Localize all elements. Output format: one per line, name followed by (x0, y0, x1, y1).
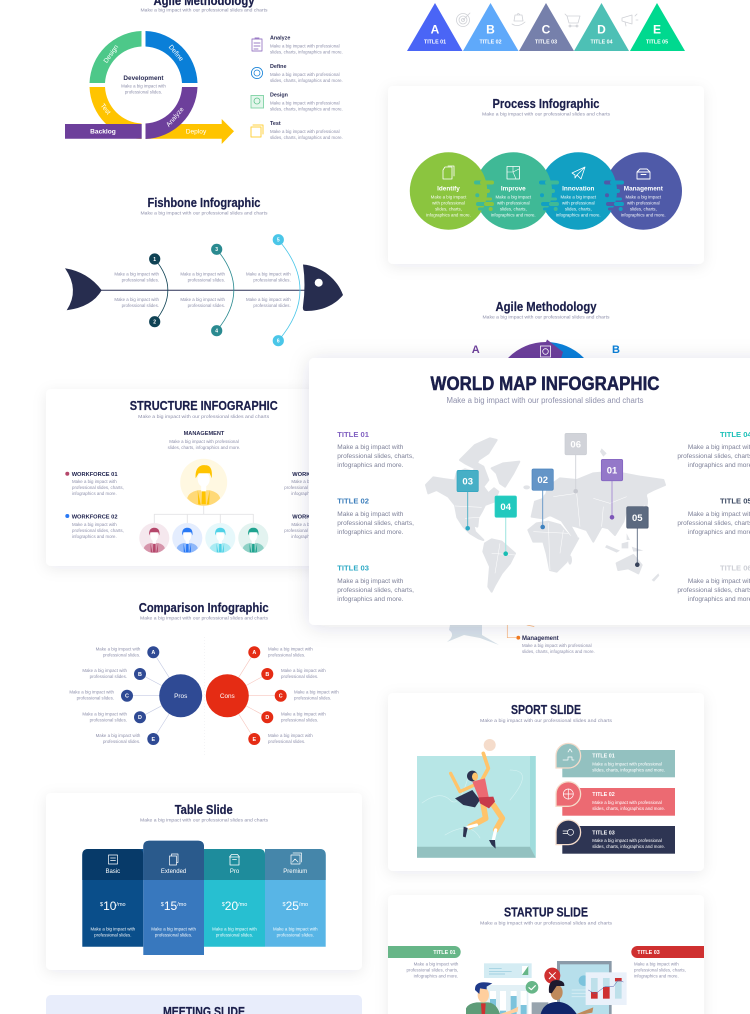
cycle top (493, 340, 599, 395)
step: innovation: Make a big impact (560, 195, 597, 200)
pros side: Make a big impact with (96, 733, 141, 738)
left titles: Make a big impact with (337, 511, 404, 518)
icon: hand bag (512, 14, 525, 26)
step: management: infographics and more. (621, 212, 666, 217)
heading: table: Table Slide (175, 803, 233, 817)
cycle diagram: Deploy (186, 128, 207, 135)
subtitle: Make a big impact with our professional slides and charts (480, 718, 613, 723)
panel: agile methodology lower (447, 299, 620, 654)
panel: fishbone infographic (65, 195, 343, 346)
tag: title 01: infographics and more. (414, 974, 458, 978)
icon: target (456, 13, 470, 26)
pros side: B (138, 672, 142, 678)
bone captions: professional slides. (188, 303, 225, 308)
subtitle: Make a big impact with our professional slides and charts (138, 414, 270, 419)
list: test: slides, charts, infographics and more. (270, 135, 343, 140)
pros side: C (125, 694, 129, 700)
cycle diagram: Define (167, 44, 185, 63)
icon: megaphone (622, 14, 638, 26)
panel: startup slide (388, 895, 704, 1014)
column: pro: Pro (230, 869, 240, 875)
org connectors (154, 505, 253, 523)
right titles (677, 430, 750, 603)
process circles (410, 152, 682, 230)
cons side: professional slides. (294, 696, 331, 701)
panel: meeting slide (46, 995, 362, 1014)
triangle E (630, 3, 685, 51)
bone captions (114, 272, 291, 308)
bone captions: Make a big impact with (246, 297, 291, 302)
step: improve: Improve (501, 186, 526, 192)
cycle diagram (65, 31, 234, 144)
cycle diagram: Test (99, 102, 112, 116)
step: identify: slides, charts, (435, 206, 462, 211)
list: define: Make a big impact with professional (270, 72, 340, 77)
column: extended: Make a big impact with (151, 927, 196, 932)
column: basic: /mo (116, 902, 126, 908)
tag: title 03: TITLE 03 (637, 950, 660, 956)
workforce 04: professional slides, charts, (284, 528, 336, 533)
panel: world map infographic (309, 358, 750, 625)
column: premium: Premium (283, 869, 307, 875)
step: identify: Make a big impact (431, 195, 467, 200)
cons side: professional slides. (281, 717, 318, 722)
column: premium: 25 (286, 899, 299, 913)
world map shape (426, 438, 665, 592)
panel: process infographic (388, 86, 704, 264)
list: test: Make a big impact with professional (270, 129, 340, 134)
triangle B (463, 3, 518, 51)
cons side: Make a big impact with (281, 711, 326, 716)
triangle C: C (542, 22, 551, 36)
cycle diagram: Development (123, 75, 164, 82)
step: improve: with professional (497, 200, 530, 206)
column: extended: 15 (164, 899, 178, 913)
step: improve: infographics and more. (491, 212, 536, 217)
workforce 01: Make a big impact with (72, 479, 117, 484)
bones 1 and 2 (149, 253, 168, 327)
column: basic: professional slides. (94, 933, 131, 938)
workforce 02 (65, 514, 124, 539)
item 02: Make a big impact with professional (592, 800, 662, 805)
item 02: slides, charts, infographics and more. (592, 806, 665, 811)
workforce 01: infographics and more. (72, 491, 117, 496)
panel: triangle titles (407, 3, 685, 51)
label B: B (612, 344, 620, 356)
item 03: TITLE 03 (592, 830, 615, 836)
triangle E: TITLE 05 (646, 40, 668, 46)
cons side: Make a big impact with (281, 668, 326, 673)
left titles: Make a big impact with (337, 578, 404, 585)
illustration: startup team (466, 961, 627, 1014)
list: design: slides, charts, infographics and more. (270, 106, 343, 111)
pin 05: 05 (632, 513, 643, 524)
pros side: professional slides. (90, 717, 127, 722)
workforce 04: Make a big impact with (291, 522, 337, 527)
cons side: professional slides. (268, 652, 305, 657)
label: management: slides, charts, infographics and more. (522, 649, 595, 654)
label: management: Management (522, 636, 559, 642)
left titles: professional slides, charts, (337, 453, 414, 460)
step: innovation: Innovation (562, 186, 595, 192)
step: identify (426, 166, 471, 217)
avatar: blue (172, 523, 202, 553)
avatar: green (238, 523, 268, 553)
cons side (206, 646, 339, 745)
avatar: red (139, 523, 169, 553)
heading: sport: SPORT SLIDE (511, 703, 581, 717)
cycle diagram: professional slides. (125, 90, 162, 95)
tag: title 03: professional slides, charts, (634, 968, 686, 972)
triangle D (574, 3, 629, 51)
triangle B: TITLE 02 (479, 40, 502, 46)
column: basic (82, 849, 143, 947)
pros side: Make a big impact with (69, 690, 115, 695)
bones 3 and 4 (211, 244, 234, 336)
label: management: Make a big impact with professional (522, 643, 592, 648)
tag: title 01: TITLE 01 (433, 950, 456, 956)
centre divider (203, 637, 205, 755)
workforce 02: Make a big impact with (72, 522, 117, 527)
triangle D: TITLE 04 (590, 40, 613, 46)
step: innovation (556, 167, 601, 217)
cons side: Make a big impact with (268, 646, 313, 651)
workforce 03: professional slides, charts, (284, 485, 336, 490)
item 01: TITLE 01 (592, 754, 615, 760)
subtitle: Make a big impact with our professional slides and charts (446, 396, 644, 405)
subtitle: Make a big impact with our professional slides and charts (140, 210, 268, 216)
pin 03 (457, 470, 478, 531)
list: design (251, 92, 343, 111)
column: basic: $ (100, 902, 103, 908)
pros side: D (138, 715, 142, 721)
tag: title 03 (631, 946, 704, 978)
panel: sport slide (388, 693, 704, 871)
list: define: slides, charts, infographics and more. (270, 78, 343, 83)
step: management: Management (624, 186, 664, 192)
pros side: professional slides. (77, 696, 114, 701)
left titles: infographics and more. (337, 529, 404, 536)
workforce 02: infographics and more. (72, 534, 117, 539)
step: improve (491, 166, 536, 217)
pros side (69, 646, 202, 745)
bone captions: Make a big impact with (246, 272, 291, 276)
left titles: TITLE 01 (337, 430, 370, 439)
column: premium: /mo (299, 902, 308, 908)
cycle diagram: Analyze (165, 106, 186, 129)
triangle C (519, 3, 574, 51)
bone captions: professional slides. (253, 303, 291, 308)
pros side: Make a big impact with (82, 668, 128, 673)
column: basic: 10 (103, 899, 117, 913)
pin 02 (532, 469, 553, 529)
pin 01 (601, 459, 623, 520)
pin 05 (627, 507, 648, 567)
left titles: infographics and more. (337, 596, 404, 603)
workforce 03: Make a big impact with (291, 479, 337, 484)
list: analyze: Analyze (270, 36, 290, 42)
step: innovation: with professional (562, 200, 595, 206)
cons side: Make a big impact with (294, 690, 339, 695)
list: design: Design (270, 92, 288, 98)
column: premium: $ (283, 902, 286, 908)
column: pro: professional slides. (216, 933, 253, 938)
tag: title 01: Make a big impact with (414, 962, 459, 966)
bone captions: Make a big impact with (114, 272, 160, 276)
triangle A: A (431, 22, 440, 36)
triangle C: TITLE 03 (535, 40, 557, 46)
column: extended: /mo (177, 902, 186, 908)
triangle B: B (486, 22, 495, 36)
workforce 04 (284, 514, 339, 539)
column: extended: Extended (161, 869, 186, 875)
tag: title 03: Make a big impact with (634, 962, 679, 966)
pin 04 (495, 496, 516, 556)
column: extended: professional slides. (155, 933, 192, 938)
step: identify: Identify (437, 186, 460, 192)
cons side: B (265, 672, 269, 678)
item 02: TITLE 02 (592, 792, 615, 798)
tag: title 01: professional slides, charts, (407, 968, 458, 972)
column: extended: $ (161, 902, 164, 908)
workforce 01 (65, 472, 124, 496)
map fragment below card (447, 625, 499, 645)
workforce 01: professional slides, charts, (72, 485, 124, 490)
step: management: with professional (627, 200, 660, 206)
left titles: professional slides, charts, (337, 520, 414, 527)
item 01: Make a big impact with professional (592, 762, 662, 766)
pros side: professional slides. (103, 652, 140, 657)
triangle E: E (653, 22, 661, 36)
step: identify: with professional (432, 200, 465, 206)
bones 3 and 4: 4 (215, 328, 218, 334)
list: define (251, 64, 343, 83)
item 03 (556, 820, 675, 854)
workforce 02: professional slides, charts, (72, 528, 124, 533)
column: basic: Make a big impact with (90, 927, 136, 932)
left titles: infographics and more. (337, 462, 404, 469)
panel: table slide (46, 793, 362, 970)
workforce 04: infographics and more. (291, 534, 336, 539)
heading: startup: STARTUP SLIDE (504, 906, 588, 920)
step: innovation: infographics and more. (556, 212, 601, 217)
left titles (337, 430, 414, 603)
management text: slides, charts, infographics and more. (168, 445, 240, 450)
item 01: slides, charts, infographics and more. (592, 768, 665, 772)
pros side: professional slides. (90, 674, 127, 679)
cons side: Cons (220, 693, 235, 700)
bone captions: Make a big impact with (114, 297, 160, 302)
list: analyze: slides, charts, infographics and more. (270, 49, 343, 54)
pin 02: 02 (537, 475, 548, 486)
pros side: E (151, 737, 155, 743)
connector: orange (507, 625, 534, 638)
workforce 01: WORKFORCE 01 (72, 472, 118, 478)
cons side: A (252, 650, 256, 656)
bones 3 and 4: 3 (215, 247, 218, 253)
column: pro (204, 849, 265, 947)
column: extended (143, 841, 204, 955)
bone captions: professional slides. (188, 278, 225, 282)
pros side: Make a big impact with (82, 711, 128, 716)
illustration: volleyball player (417, 739, 536, 858)
pin 06 (565, 433, 586, 494)
step: management: Make a big impact (625, 195, 662, 200)
list: design: Make a big impact with professional (270, 100, 340, 105)
cons side: Make a big impact with (268, 733, 313, 738)
subtitle: Make a big impact with our professional slides and charts (482, 314, 610, 320)
column: premium: professional slides. (277, 933, 314, 938)
bones 5 and 6: 6 (277, 338, 280, 344)
left titles: TITLE 03 (337, 564, 369, 573)
fish skeleton (65, 264, 343, 311)
column: pro: $ (222, 902, 225, 908)
avatar: manager (180, 459, 227, 506)
management text (168, 431, 240, 450)
step: management (621, 169, 666, 217)
cons side: C (279, 694, 283, 700)
bone captions: Make a big impact with (180, 297, 226, 302)
triangle D: D (597, 22, 606, 36)
workforce 04: WORKFORCE 04 (292, 514, 339, 520)
workforce 02: WORKFORCE 02 (72, 514, 118, 520)
pin 06: 06 (570, 440, 581, 450)
list: test: Test (270, 121, 281, 127)
pin 03: 03 (462, 476, 473, 488)
pin 01: 01 (607, 466, 618, 476)
subtitle: Make a big impact with our professional slides and charts (140, 616, 269, 620)
pros side: Make a big impact with (96, 646, 141, 651)
step: improve: slides, charts, (500, 206, 527, 211)
heading: comparison: Comparison Infographic (139, 600, 269, 615)
heading: world map: WORLD MAP INFOGRAPHIC (430, 374, 660, 395)
triangle A (407, 3, 462, 51)
cons side: professional slides. (281, 674, 318, 679)
subtitle: Make a big impact with our professional slides and charts (482, 112, 611, 116)
pros side: Pros (174, 693, 187, 700)
bone captions: professional slides. (122, 278, 159, 282)
step: innovation: slides, charts, (565, 206, 592, 211)
step: improve: Make a big impact (495, 195, 532, 200)
cons side: E (252, 737, 256, 743)
pin 04: 04 (500, 502, 512, 513)
column: basic: Basic (105, 869, 120, 875)
cons side: D (265, 715, 269, 721)
management text: Make a big impact with professional (169, 439, 239, 444)
left titles: Make a big impact with (337, 444, 404, 451)
bone captions: professional slides. (122, 303, 159, 308)
heading: structure: STRUCTURE INFOGRAPHIC (130, 399, 278, 413)
list: analyze: Make a big impact with professional (270, 43, 340, 48)
panel: comparison infographic (69, 600, 339, 755)
tag: title 03: infographics and more. (634, 974, 679, 978)
bones 1 and 2: 2 (153, 320, 156, 326)
column: pro: /mo (238, 902, 247, 908)
bones 5 and 6: 5 (277, 238, 280, 244)
tag: title 01 (388, 946, 461, 978)
workforce 03: infographics and more. (291, 491, 336, 496)
avatar: cyan (205, 523, 235, 553)
workforce 03 (284, 472, 338, 496)
left titles: professional slides, charts, (337, 587, 414, 594)
list: define: Define (270, 64, 286, 70)
column: pro: Make a big impact with (212, 927, 257, 932)
item 01 (556, 743, 675, 777)
bones 1 and 2: 1 (153, 257, 156, 263)
subtitle: Make a big impact with our professional slides and charts (140, 818, 269, 822)
heading: agile methodology: Agile Methodology (496, 299, 597, 314)
list: analyze (252, 36, 343, 54)
cycle diagram: Design (103, 44, 120, 65)
heading: process: Process Infographic (492, 96, 600, 111)
left titles: TITLE 02 (337, 497, 369, 506)
column: pro: 20 (225, 899, 238, 913)
column: premium: Make a big impact with (273, 927, 318, 932)
pros side: professional slides. (103, 739, 140, 744)
column: premium (265, 849, 326, 947)
list: test (251, 121, 343, 140)
label: management (516, 636, 595, 654)
item 03: slides, charts, infographics and more. (592, 844, 665, 849)
icon: cart (565, 14, 580, 27)
bones 5 and 6 (273, 234, 300, 346)
bone captions: professional slides. (253, 278, 291, 282)
cycle diagram: Backlog (90, 128, 116, 135)
cycle diagram: Make a big impact with (121, 84, 166, 89)
subtitle: Make a big impact with our professional slides and charts (140, 8, 268, 12)
cons side: professional slides. (268, 739, 305, 744)
label A: A (472, 344, 480, 356)
workforce 03: WORKFORCE 03 (292, 472, 338, 478)
subtitle: Make a big impact with our professional slides and charts (480, 920, 613, 926)
management text: MANAGEMENT (184, 431, 225, 437)
heading: fishbone: Fishbone Infographic (148, 195, 260, 210)
item 02 (556, 782, 675, 816)
panel: structure infographic (46, 389, 356, 566)
bone captions: Make a big impact with (180, 272, 226, 276)
item 03: Make a big impact with professional (592, 838, 662, 843)
panel: agile methodology top (65, 0, 343, 144)
step: identify: infographics and more. (426, 212, 471, 217)
triangle A: TITLE 01 (424, 40, 446, 46)
step: management: slides, charts, (630, 206, 657, 211)
pros side: A (151, 650, 155, 656)
